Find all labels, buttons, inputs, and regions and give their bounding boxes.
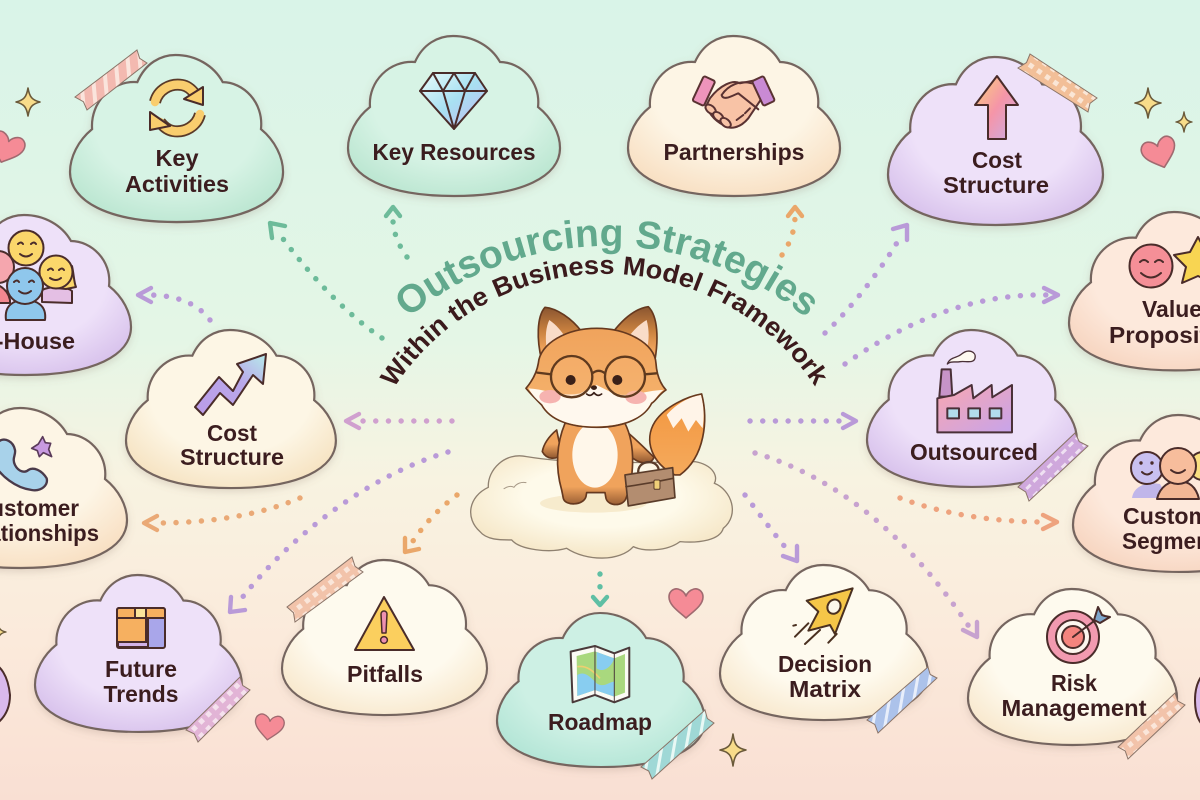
panel: customer segments: [1073, 415, 1200, 572]
sparkle: left edge: [0, 624, 6, 640]
fox eyes and mouth: [566, 375, 622, 395]
icon: rocket: [793, 588, 853, 644]
icon: handshake: [692, 76, 775, 129]
label: Cost Structure: Cost: [207, 420, 257, 446]
panel: value proposition: [1069, 212, 1200, 370]
partial shield: right edge: [1195, 672, 1200, 727]
label: Future Trends: Future: [105, 656, 177, 682]
icon: group of customers: [1131, 448, 1200, 499]
panel: customer relationships: [0, 408, 127, 568]
heart: bottom left: [253, 713, 285, 742]
label: Decision Matrix: [778, 651, 872, 702]
arrow: to outsourced: [750, 414, 856, 428]
fox head: [526, 328, 666, 427]
panel: decision matrix: [720, 565, 937, 733]
label: Value Proposition: [1109, 296, 1200, 348]
panel: key activities: [70, 50, 283, 222]
heart: bottom center: [669, 589, 703, 618]
label: Outsourced: Outsourced: [910, 439, 1038, 465]
icon: phone and star: [0, 437, 52, 490]
cloud highlight: [504, 482, 526, 489]
washi tape: pink stripes: [75, 50, 147, 110]
washi tape: orange check: [1018, 54, 1097, 112]
panel: partnerships: [628, 36, 840, 196]
label: Cost Structure: [943, 147, 1049, 198]
arrow: to key resources: [386, 207, 407, 257]
icon: rising trend arrow: [195, 354, 266, 415]
arrow: to pitfalls: [405, 495, 457, 552]
icon: sync arrows: [150, 85, 203, 131]
icon: warning triangle: [355, 597, 414, 650]
label: Cost Structure: [180, 420, 284, 470]
icon: target with arrow: [1047, 607, 1110, 663]
label: Risk Management: [1002, 670, 1147, 721]
fox ears: [538, 307, 657, 360]
icon: team of people: [0, 230, 76, 320]
icon: up arrow: [975, 76, 1018, 139]
icon: smile and star: [1130, 237, 1200, 288]
sparkle: top left: [16, 88, 40, 116]
fox body: [558, 423, 633, 505]
panel: in-house: [0, 215, 131, 375]
label: Key Activities: [125, 145, 229, 197]
label: Key Resources: Key Resources: [372, 139, 536, 165]
label: Pitfalls: Pitfalls: [347, 661, 423, 687]
label: Decision Matrix: Decision: [778, 651, 872, 677]
arrow: to value proposition: [845, 288, 1058, 364]
label: Cost Structure: Structure: [943, 172, 1049, 198]
arrow: to key activities: [270, 223, 382, 338]
panel: cost structure (right): [888, 54, 1103, 225]
ground shadow: [540, 494, 647, 513]
label: Key Activities: Key: [155, 145, 199, 171]
title line: Outsourcing Strategies: Outsourcing Strategies: [398, 220, 815, 314]
heart: top left: [0, 129, 27, 168]
arrow: to risk management: [755, 453, 977, 637]
label: Partnerships: Partnerships: [664, 139, 804, 165]
label: Cost Structure: Cost: [972, 147, 1022, 173]
briefcase: [625, 462, 675, 506]
fox glasses: [537, 356, 657, 397]
icon: factory: [937, 351, 1012, 432]
icon: diamond: [420, 73, 487, 129]
label: Future Trends: [104, 656, 178, 707]
panel: cost structure (left): [126, 330, 336, 488]
arrow: to customer relationships: [144, 498, 300, 530]
central fox mascot: [471, 307, 732, 558]
sparkle: bottom center: [720, 734, 746, 766]
washi tape: salmon check: [1118, 693, 1185, 759]
fox blush: [539, 390, 647, 404]
panel: key resources: [348, 36, 560, 196]
arrow: to future trends: [230, 452, 448, 612]
arrow: to partnerships: [782, 207, 802, 255]
label: Roadmap: Roadmap: [548, 709, 652, 735]
arrow: to customer segments: [900, 498, 1057, 529]
sparkle: top right large: [1135, 88, 1161, 118]
title: curved heading: [379, 220, 826, 386]
cloud platform: [471, 456, 732, 558]
label: Future Trends: Trends: [104, 681, 178, 707]
panel: future trends: [35, 575, 250, 742]
washi tape: purple pattern: [1018, 433, 1088, 501]
label: Decision Matrix: Matrix: [789, 676, 861, 702]
panel: risk management: [968, 589, 1185, 759]
heart: top right: [1139, 134, 1180, 173]
label: Customer Relationships: [0, 495, 99, 546]
label: Risk Management: Management: [1002, 695, 1147, 721]
label: Cost Structure: Structure: [180, 444, 284, 470]
arrow: to cost structure right: [825, 225, 907, 333]
icon: calendar layout: [117, 608, 165, 648]
washi tape: peach check: [287, 557, 363, 622]
partial shield: left edge: [0, 663, 10, 725]
sparkle: top right small: [1176, 112, 1192, 132]
arrow: to in-house: [138, 288, 210, 320]
arrow: to decision matrix: [745, 495, 797, 561]
label: Customer Segments: [1122, 503, 1200, 554]
arrow: to cost structure left: [346, 414, 452, 428]
fox tail: [650, 394, 705, 475]
arrow: to roadmap: [593, 574, 607, 605]
label: Key Activities: Activities: [125, 171, 229, 197]
label: Risk Management: Risk: [1051, 670, 1098, 696]
panel: pitfalls: [282, 557, 487, 715]
washi tape: teal stripes: [641, 710, 714, 779]
washi tape: mauve pattern: [186, 677, 250, 742]
fox belly: [572, 422, 618, 488]
washi tape: blue stripes: [867, 667, 937, 733]
panel: roadmap: [497, 613, 714, 779]
icon: folded map: [571, 646, 629, 702]
subtitle line: Within the Business Model Framework: Within the Business Model Framework: [379, 256, 826, 386]
panel: outsourced: [867, 330, 1088, 501]
fox arms: [542, 430, 654, 463]
